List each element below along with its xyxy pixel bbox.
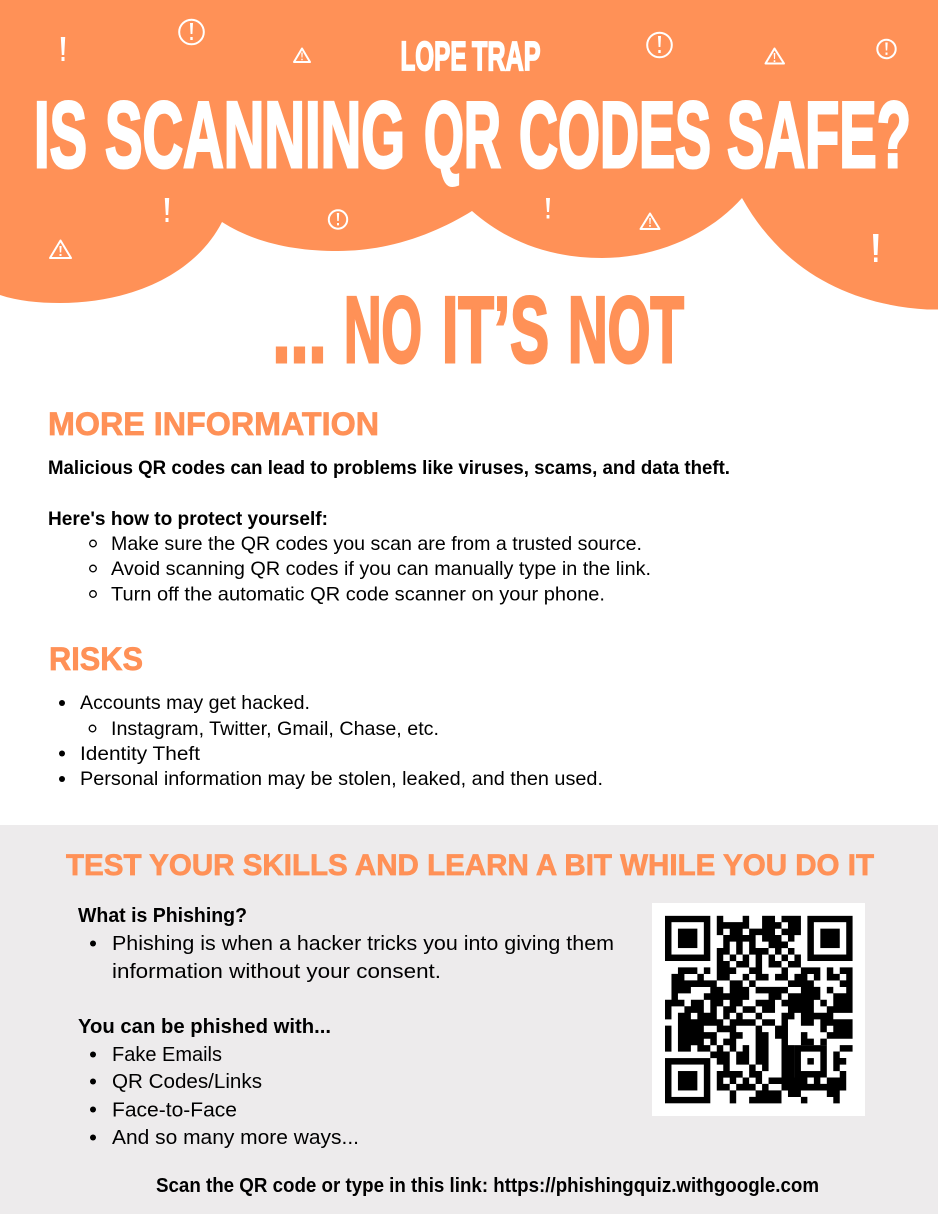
icon: circled exclamation marks bbox=[179, 20, 896, 229]
phishing methods list: And so many more ways... bbox=[112, 1126, 359, 1149]
heading: MORE INFORMATION bbox=[48, 406, 379, 442]
phishing methods list: You can be phished with... bbox=[78, 1015, 331, 1038]
panel: orange cloud header bbox=[0, 0, 938, 310]
call to action link: Scan the QR code or type in this link: https://phishingquiz.withgoogle.com bbox=[156, 1174, 819, 1197]
subtitle: no it's not: IT’S bbox=[442, 277, 549, 382]
phishing definition: Phishing is when a hacker tricks you into giving them bbox=[112, 932, 614, 955]
heading: RISKS bbox=[49, 641, 143, 677]
brand name: TRAP bbox=[472, 33, 540, 79]
risks list: Instagram, Twitter, Gmail, Chase, etc. bbox=[111, 718, 439, 740]
phishing methods list: Face-to-Face bbox=[112, 1098, 237, 1122]
subtitle: no it's not: ... bbox=[272, 277, 326, 382]
panel: more information bbox=[48, 406, 730, 606]
title: QR bbox=[424, 82, 501, 187]
risks list: Personal information may be stolen, leaked, and then used. bbox=[80, 768, 603, 790]
protection list: Avoid scanning QR codes if you can manually type in the link. bbox=[111, 558, 651, 580]
QR code bbox=[652, 903, 865, 1116]
icon: exclamation marks bbox=[61, 37, 879, 262]
panel: risks bbox=[49, 641, 603, 790]
intro sentence: Malicious QR codes can lead to problems like viruses, scams, and data theft. bbox=[48, 457, 730, 479]
protection subheading: Here's how to protect yourself: bbox=[48, 508, 328, 530]
phishing methods list: Fake Emails bbox=[112, 1043, 222, 1066]
subtitle: no it's not: NO bbox=[344, 277, 422, 382]
phishing methods list: QR Codes/Links bbox=[112, 1070, 262, 1093]
risks list bbox=[59, 692, 603, 790]
icon: warning triangles bbox=[50, 48, 784, 258]
phishing methods list bbox=[78, 1015, 359, 1149]
brand name: LOPE bbox=[400, 33, 466, 79]
subtitle: no it's not: NOT bbox=[568, 277, 684, 382]
protection list: Make sure the QR codes you scan are from a trusted source. bbox=[111, 533, 642, 555]
protection list bbox=[90, 533, 651, 606]
title: CODES bbox=[519, 82, 711, 187]
protection list: Turn off the automatic QR code scanner on your phone. bbox=[111, 584, 605, 606]
phishing definition: What is Phishing? bbox=[78, 904, 247, 927]
risks list: Identity Theft bbox=[80, 743, 201, 765]
phishing definition: information without your consent. bbox=[112, 960, 441, 983]
title: SCANNING bbox=[105, 82, 405, 187]
heading: TEST YOUR SKILLS AND LEARN A BIT WHILE YOU DO IT bbox=[66, 849, 874, 882]
title: IS bbox=[34, 82, 87, 187]
risks list: Accounts may get hacked. bbox=[80, 692, 310, 714]
panel: test your skills bbox=[0, 825, 938, 1214]
phishing definition bbox=[78, 904, 614, 983]
